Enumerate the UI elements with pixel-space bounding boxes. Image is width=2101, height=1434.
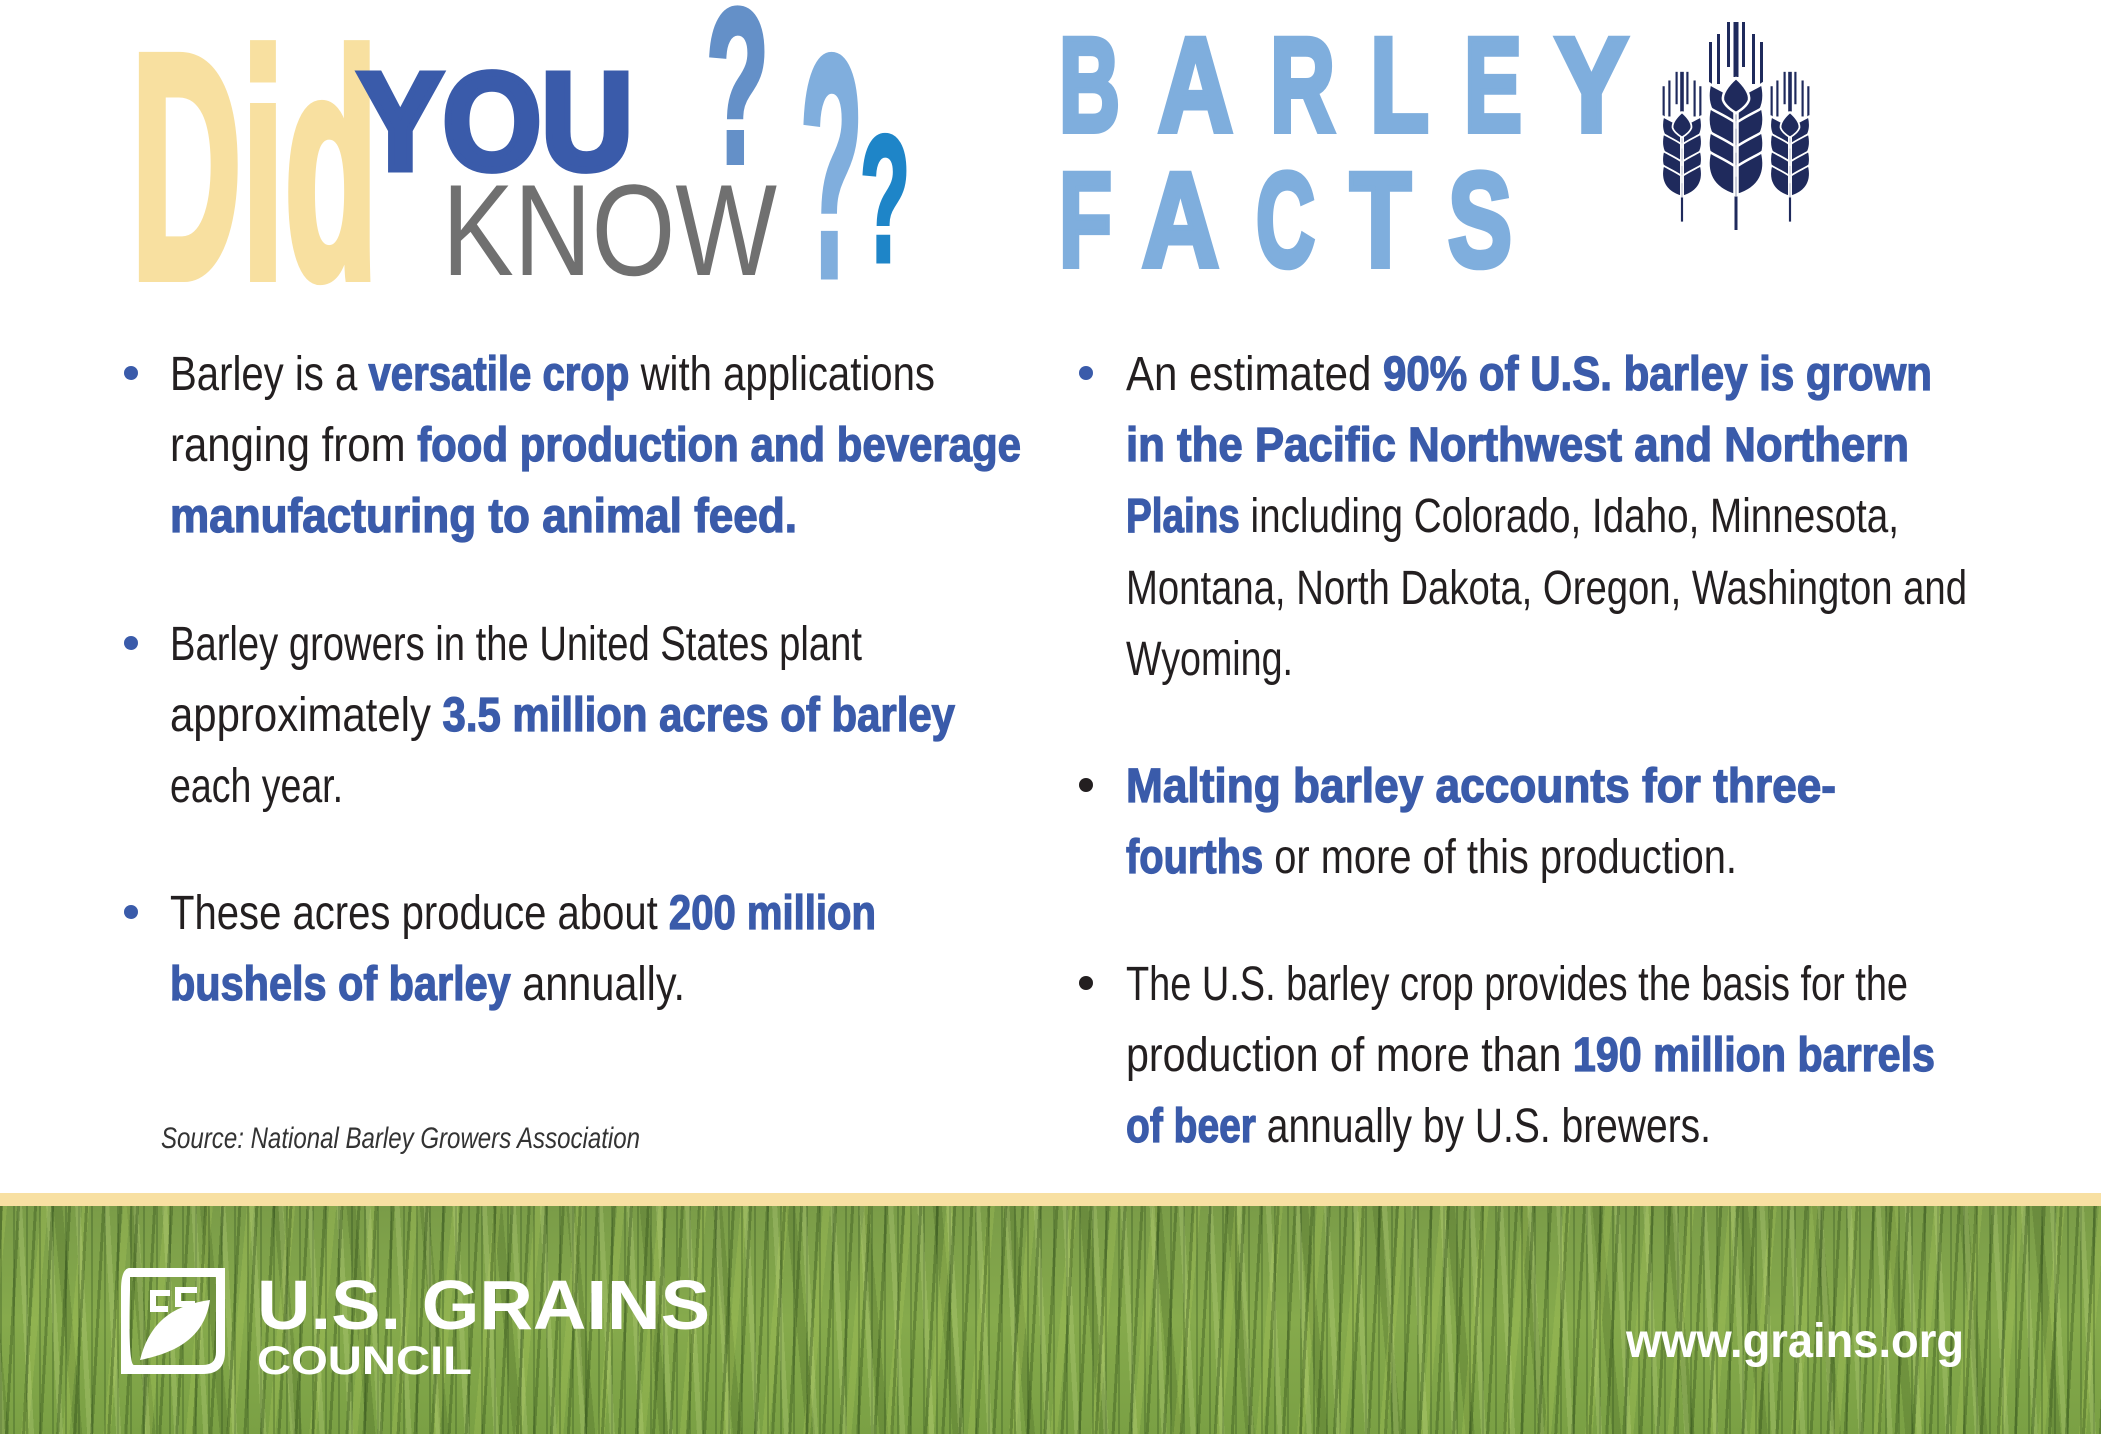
website url: www.grains.org: [1625, 1315, 1964, 1368]
fact 3: bushels of barley annually.: [170, 958, 685, 1011]
title: Barley Facts: R: [1270, 11, 1335, 160]
fact 2: approximately 3.5 million acres of barley: [170, 689, 955, 742]
fact 3: [124, 887, 876, 1011]
fact 5: fourths or more of this production.: [1126, 831, 1737, 884]
fact 4: in the Pacific Northwest and Northern: [1126, 419, 1909, 472]
fact 4: Plains including Colorado, Idaho, Minnesota,: [1126, 490, 1899, 543]
fact 5: Malting barley accounts for three-: [1126, 760, 1836, 813]
title: Barley Facts: E: [1464, 11, 1522, 160]
title: Did You Know: YOU: [358, 45, 633, 199]
title: Barley Facts: T: [1350, 146, 1411, 295]
icon: wheat stalks: [1662, 22, 1810, 230]
title: Barley Facts: L: [1370, 11, 1429, 160]
fact 3: These acres produce about 200 million: [170, 887, 876, 940]
right column facts: [1079, 348, 1967, 1153]
fact 5: [1079, 760, 1836, 884]
title: Barley Facts: A: [1142, 146, 1219, 295]
fact 4: Wyoming.: [1126, 633, 1293, 686]
logo: U.S. Grains Council: [121, 1266, 710, 1383]
fact 1: Barley is a versatile crop with applications: [170, 348, 935, 401]
footer grass background: [0, 1206, 2101, 1434]
fact 6: The U.S. barley crop provides the basis for the: [1126, 958, 1908, 1011]
title: Barley Facts: Y: [1555, 11, 1628, 160]
title: Barley Facts: C: [1256, 146, 1315, 295]
fact 6: [1079, 958, 1935, 1153]
title: Did You Know: [131, 0, 910, 345]
left column facts: [124, 348, 1021, 1011]
fact 4: An estimated 90% of U.S. barley is grown: [1126, 348, 1932, 401]
fact 2: Barley growers in the United States plant: [170, 618, 862, 671]
title: Did You Know: KNOW: [442, 157, 777, 303]
fact 6: of beer annually by U.S. brewers.: [1126, 1100, 1711, 1153]
title: Did You Know: ?: [800, 0, 863, 343]
title: Barley Facts: F: [1059, 146, 1112, 295]
text: ?: [860, 99, 910, 300]
title: Barley Facts: S: [1448, 146, 1512, 295]
fact 2: [124, 618, 955, 813]
footer band: [0, 1193, 2101, 1206]
source note: Source: National Barley Growers Association: [161, 1122, 640, 1155]
fact 6: production of more than 190 million barrels: [1126, 1029, 1935, 1082]
logo: U.S. Grains Council: U.S. GRAINS: [257, 1266, 710, 1344]
fact 4: [1079, 348, 1967, 686]
title: Barley Facts: B: [1059, 11, 1120, 160]
logo: U.S. Grains Council: COUNCIL: [257, 1339, 472, 1383]
fact 2: each year.: [170, 760, 343, 813]
fact 1: ranging from food production and beverage: [170, 419, 1021, 472]
title: Barley Facts: A: [1158, 11, 1233, 160]
title: Barley Facts: [1059, 11, 1628, 295]
fact 1: [124, 348, 1021, 543]
fact 1: manufacturing to animal feed.: [170, 490, 797, 543]
